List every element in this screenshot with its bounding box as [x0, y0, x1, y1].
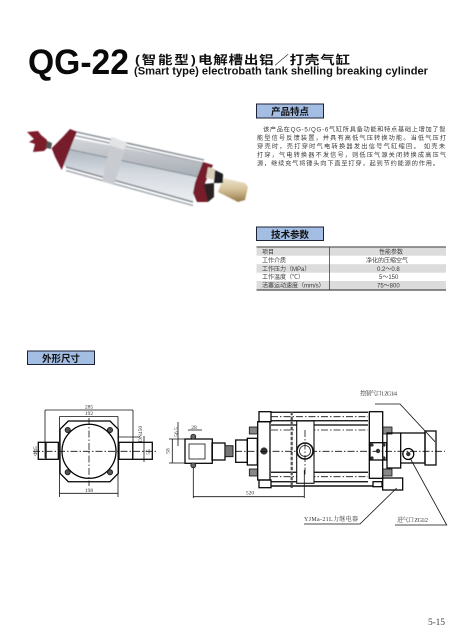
table: technical parameters: 项目: [262, 249, 274, 256]
heading: outline dimensions: 外形尺寸: [42, 353, 80, 365]
table: technical parameters: 活塞运动速度（mm/s）: [262, 282, 325, 290]
drawing: end view: 192: [85, 411, 93, 417]
chinese title: [135, 52, 350, 67]
table: technical parameters: 75～800: [377, 284, 400, 290]
fork end: 56.5: [174, 427, 180, 437]
callout: pressure relay: YJMa-21L力继电器: [304, 515, 358, 523]
chinese title: 智能型: [142, 52, 189, 67]
model number: QG-22: [28, 43, 129, 82]
product photo: cylinder: [27, 129, 248, 206]
drawing: end view: DN450: [138, 426, 144, 442]
drawing: end view: [33, 404, 156, 497]
chinese title: 电解槽出铝／打壳气缸: [198, 52, 350, 67]
page number: 5-15: [428, 618, 445, 628]
fork end: 28: [191, 425, 197, 431]
drawing: end view: Φ45: [33, 446, 39, 456]
text block: product features: 源，继续充气将锤头向下直至打穿，起到节约能源的作用。: [257, 160, 439, 168]
table: technical parameters: 净化的压缩空气: [366, 256, 408, 264]
callout: air inlet: [395, 458, 447, 525]
heading: outline dimensions: [28, 351, 94, 365]
callout: air inlet: 进气口 ZG1/2: [397, 516, 428, 524]
rear end and fittings: [369, 412, 436, 490]
table: technical parameters: 性能参数: [379, 248, 403, 256]
title: [28, 43, 428, 82]
english title: (Smart type) electrobath tank shelling breaking cylinder: [134, 66, 428, 78]
table: technical parameters: 工作压力（MPa）: [262, 265, 310, 273]
drawing: end view: 198: [85, 488, 93, 494]
text block: product features: 该产品在QG-5/QG-6气缸所具备功能和特点基础上增加了智: [263, 126, 446, 134]
text block: product features: [257, 126, 446, 168]
heading: technical parameters: [256, 227, 324, 241]
table: technical parameters: 0.2～0.8: [377, 267, 400, 273]
table: technical parameters: [256, 247, 446, 290]
fork end: [166, 422, 233, 468]
fork end: 58: [166, 448, 172, 454]
cylinder body: 520: [246, 490, 254, 496]
table: technical parameters: 5～150: [379, 275, 399, 281]
chinese title: (: [135, 53, 140, 67]
callout: pressure relay: [304, 488, 397, 524]
heading: product features: 产品特点: [271, 106, 309, 118]
table: technical parameters: 工作温度（℃）: [262, 273, 304, 281]
text block: product features: 穿壳时，壳打穿时气电转换器发出信号气缸缩回。 如壳未: [257, 142, 445, 150]
drawing: side view: [166, 412, 445, 498]
callout: control port: [360, 390, 435, 442]
cylinder body: [193, 412, 445, 498]
text block: product features: 打穿，气电转换器不发信号，则低压气源关闭转换成高压气: [257, 151, 446, 159]
chinese title: ): [191, 53, 196, 67]
drawing: end view: 285: [85, 404, 93, 410]
heading: product features: [256, 104, 324, 118]
drawing: end view: 55: [146, 449, 152, 455]
text block: product features: 能型信号反馈装置，并具有高低气压转换功能。当低气压打: [257, 134, 446, 142]
heading: technical parameters: 技术参数: [271, 229, 309, 241]
callout: control port: 控制气口1 ZG1/4: [360, 390, 397, 398]
table: technical parameters: 工作介质: [262, 256, 286, 264]
